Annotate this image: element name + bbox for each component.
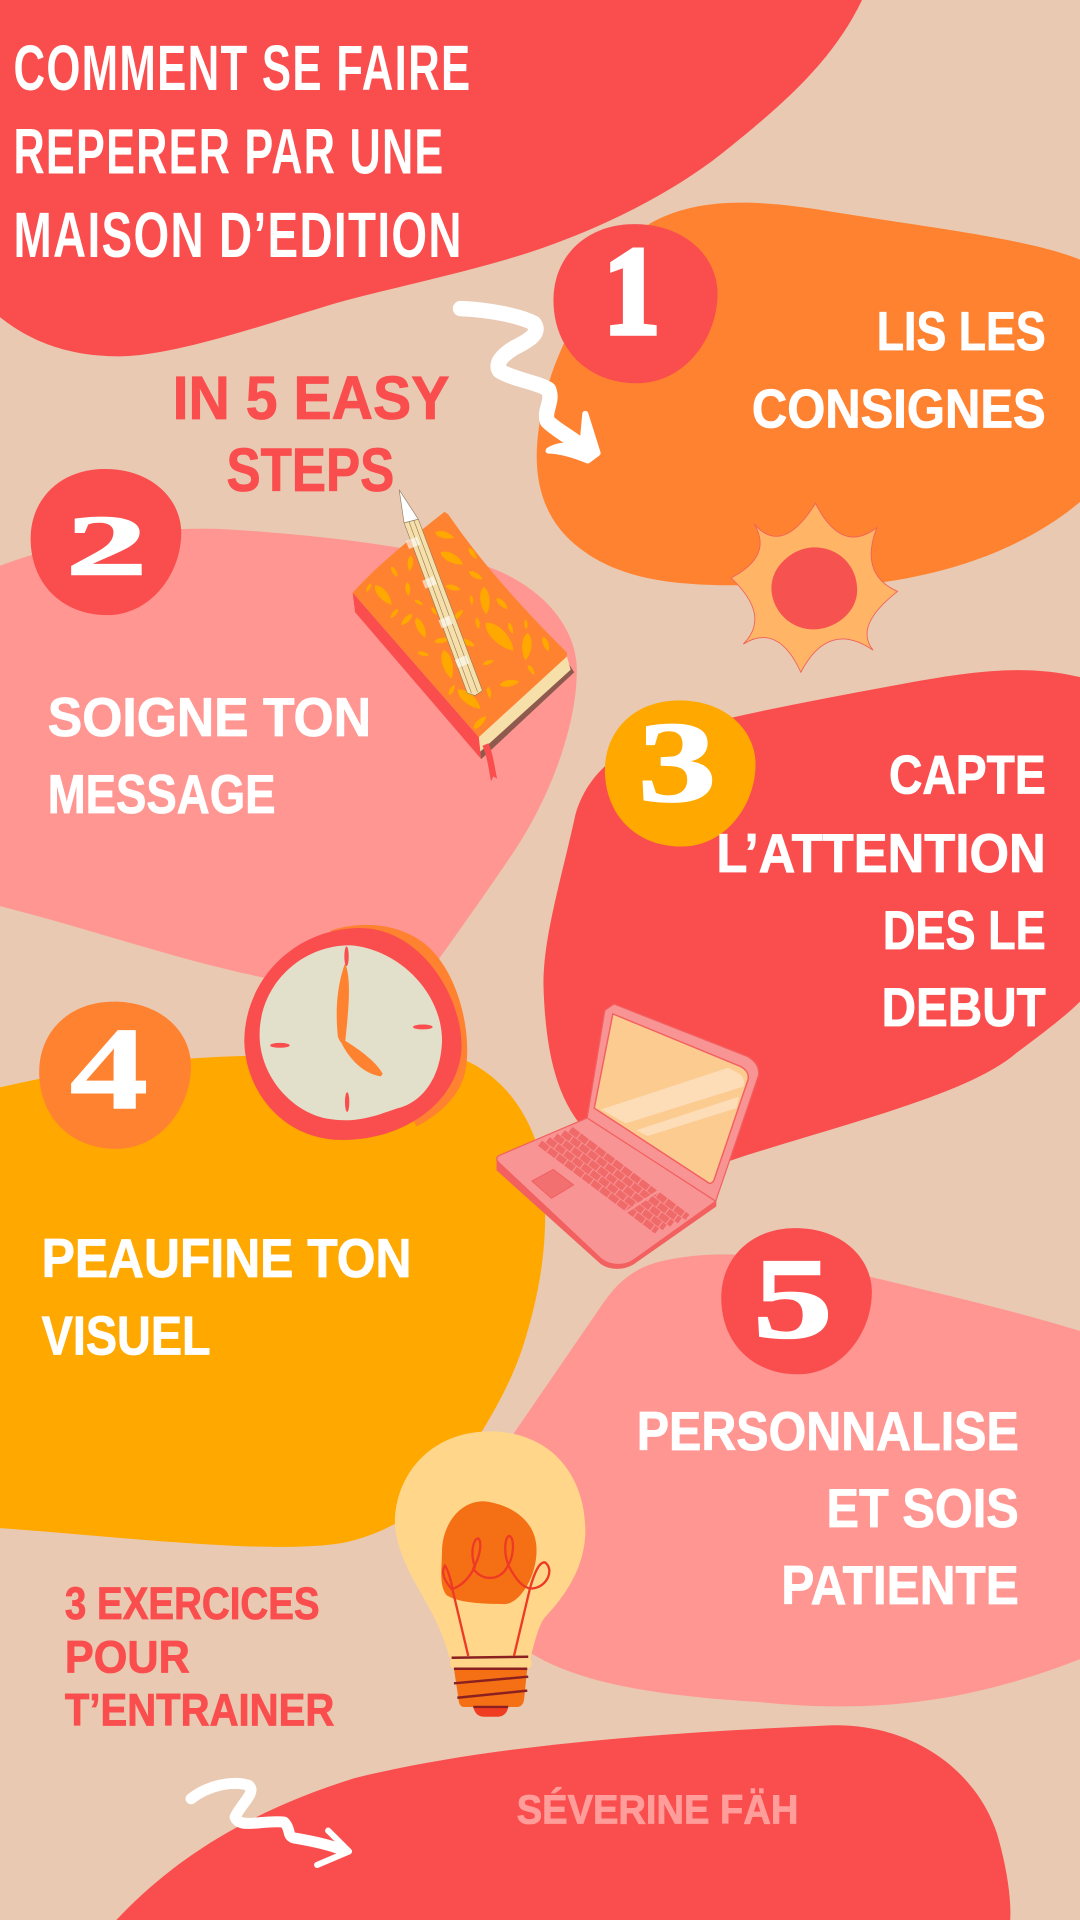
icon: clock	[244, 925, 467, 1140]
step 3 text: L’ATTENTION	[716, 822, 1046, 884]
badge: number 1: 1	[604, 223, 660, 361]
arrow: exercises to author	[191, 1783, 349, 1865]
panel: step 2 background	[0, 529, 577, 986]
number 3: 3	[638, 698, 716, 826]
step 3 text	[716, 743, 1046, 1038]
title: REPERER PAR UNE	[13, 116, 444, 187]
icon: book and pencil	[353, 490, 574, 781]
step 4 text: VISUEL	[42, 1304, 211, 1366]
badge: number 2	[31, 469, 181, 615]
title	[13, 33, 471, 271]
icon: sun	[731, 503, 898, 672]
step 3 text: CAPTE	[889, 743, 1046, 805]
exercises text: 3 EXERCICES	[65, 1578, 320, 1629]
subtitle: STEPS	[227, 436, 394, 504]
panel: title background	[0, 0, 862, 356]
panel: step 5 background	[514, 1254, 1080, 1706]
title: MAISON D’EDITION	[13, 200, 463, 271]
exercises text: T’ENTRAINER	[65, 1684, 334, 1735]
step 2 text: SOIGNE TON	[48, 686, 371, 748]
icon: light bulb	[395, 1431, 585, 1717]
panel: step 4 background	[0, 1056, 545, 1547]
step 5 text	[637, 1400, 1019, 1616]
title: COMMENT SE FAIRE	[13, 33, 471, 104]
badge: number 1	[553, 223, 718, 383]
step 5 text: PATIENTE	[781, 1554, 1019, 1616]
badge: number 5	[721, 1228, 872, 1374]
exercises text	[65, 1578, 334, 1735]
speckles	[365, 529, 551, 731]
step 4 text	[42, 1227, 411, 1366]
badge: number 3	[605, 700, 756, 847]
pencil	[404, 519, 482, 696]
panel: step 3 background	[543, 670, 1080, 1161]
step 3 text: DEBUT	[882, 976, 1046, 1038]
arrow: title to step 1	[460, 309, 598, 460]
step 1 text: CONSIGNES	[752, 377, 1046, 439]
step 2 text	[48, 686, 371, 825]
author name: SÉVERINE FÄH	[517, 1786, 798, 1832]
exercises text: POUR	[65, 1632, 190, 1683]
step 1 text: LIS LES	[877, 300, 1046, 362]
number 5: 5	[753, 1234, 833, 1362]
number 2: 2	[66, 498, 147, 593]
step 2 text: MESSAGE	[48, 763, 276, 825]
keyboard	[540, 1129, 687, 1231]
icon: laptop	[497, 1004, 759, 1268]
step 3 text: DES LE	[883, 899, 1046, 961]
badge: number 4	[39, 1002, 191, 1149]
step 1 text	[752, 300, 1046, 439]
step 5 text: ET SOIS	[827, 1477, 1019, 1539]
panel: step 1 background	[537, 203, 1080, 585]
step 5 text: PERSONNALISE	[637, 1400, 1019, 1462]
subtitle	[173, 364, 449, 504]
step 4 text: PEAUFINE TON	[42, 1227, 411, 1289]
number 4: 4	[70, 1004, 148, 1134]
panel: bottom author band	[116, 1725, 1010, 1920]
subtitle: IN 5 EASY	[173, 364, 449, 432]
